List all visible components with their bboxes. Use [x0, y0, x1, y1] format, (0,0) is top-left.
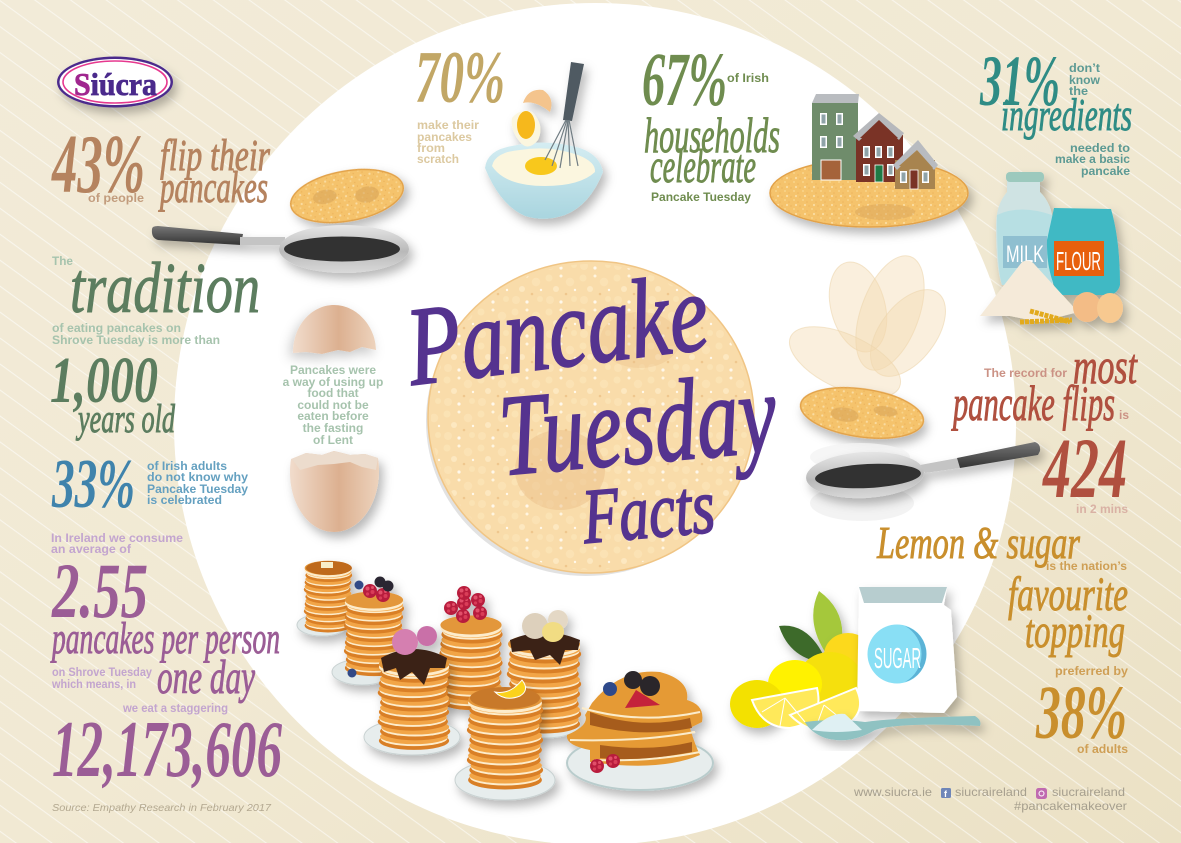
- stone house: [893, 140, 938, 189]
- stat: 33%: 33%: [51, 446, 135, 523]
- pancake tossed: [287, 161, 407, 231]
- stat: the tradition 1,000 years old: [50, 248, 260, 441]
- text: pancakes were a way of using up food: could not be: [297, 398, 369, 412]
- sugar bag: SUGAR: [874, 643, 921, 675]
- illustration: mixing bowl, egg and whisk: [485, 62, 603, 219]
- text: pancakes were a way of using up food: a way of using up: [283, 375, 383, 389]
- stack 6: lemon slice: [455, 680, 555, 800]
- illustration: pancake in air above pan: [152, 161, 409, 273]
- stat: 2.55 pancakes per person, 12,173,606: pancakes per person: [50, 614, 280, 663]
- stat: 2.55 pancakes per person, 12,173,606: we eat a staggering: [122, 701, 228, 715]
- stat: 33%: Pancake Tuesday: [147, 482, 248, 496]
- stat: lemon and sugar 38%: Lemon & sugar: [876, 517, 1081, 568]
- text: pancakes were a way of using up food: of Lent: [313, 433, 353, 447]
- stat: 31% ingredients: don’t: [1069, 61, 1100, 75]
- stat: the tradition 1,000 years old: of eating pancakes on: [52, 321, 181, 335]
- text: pancakes were a way of using up food: [283, 363, 383, 447]
- stat: the tradition 1,000 years old: 1,000: [50, 344, 158, 417]
- social links: #pancakemakeover: [1014, 799, 1127, 813]
- social links: [853, 785, 1127, 813]
- frying pan: [152, 225, 409, 273]
- stat: 31% ingredients: 31%: [979, 41, 1060, 121]
- stat: lemon and sugar 38%: preferred by: [1055, 664, 1128, 678]
- stat: 2.55 pancakes per person, 12,173,606: which means, in: [51, 677, 136, 691]
- stat: 67% households celebrate: Pancake Tuesday: [651, 190, 751, 204]
- source note: Source: Empathy Research in February 2017: [52, 802, 272, 814]
- logo: Siucra: Siúcra: [74, 66, 157, 102]
- social links: www.siucra.ie: [853, 785, 932, 799]
- flour pile: [980, 261, 1078, 322]
- illustration: pancake stacks: [297, 561, 713, 800]
- stat: 33%: is celebrated: [147, 493, 222, 507]
- illustration: pancake with houses: [770, 94, 968, 227]
- eggs: [1073, 292, 1123, 323]
- main title: Tuesday: [494, 349, 782, 501]
- illustration: lemons, sugar, spoon: [730, 587, 980, 740]
- stat: 70% make their pancakes: 70%: [415, 37, 505, 119]
- stat: 70% make their pancakes: from: [417, 141, 445, 155]
- text: pancakes were a way of using up food: food that: [307, 386, 359, 400]
- stat: the tradition 1,000 years old: The: [52, 254, 73, 268]
- stat: the tradition 1,000 years old: tradition: [70, 248, 260, 328]
- stat: 43% flip their pancakes: pancakes: [158, 163, 268, 212]
- stat: 67% households celebrate: households: [644, 107, 780, 163]
- whole lemons: [730, 633, 872, 728]
- wheat: [1020, 311, 1072, 322]
- stat: 2.55 pancakes per person, 12,173,606: an average of: [51, 542, 132, 556]
- stack 5: chocolate and banana: [507, 610, 581, 738]
- text: pancakes were a way of using up food: Pancakes were: [290, 363, 376, 377]
- stat: 2.55 pancakes per person, 12,173,606: one day: [157, 651, 255, 704]
- text: pancakes were a way of using up food: the fasting: [303, 421, 363, 435]
- icon: facebook: f: [944, 789, 948, 799]
- stat: 43% flip their pancakes: [51, 118, 271, 212]
- stat: record 424 flips: 424: [1042, 420, 1127, 516]
- stat: 43% flip their pancakes: flip their: [160, 131, 271, 180]
- stat: record 424 flips: is: [1119, 408, 1129, 422]
- stat: 2.55 pancakes per person, 12,173,606: In Ireland we consume: [51, 531, 183, 545]
- stat: the tradition 1,000 years old: years old: [75, 396, 176, 441]
- stat: 2.55 pancakes per person, 12,173,606: [50, 531, 282, 794]
- illustration: milk, flour, eggs: [980, 172, 1123, 323]
- stat: the tradition 1,000 years old: Shrove Tuesday is more than: [52, 333, 220, 347]
- white central circle: [174, 3, 1016, 843]
- sugar bag: [857, 587, 957, 713]
- social links: siucraireland: [1052, 785, 1125, 799]
- stat: 33%: do not know why: [147, 470, 248, 484]
- spoon: [805, 714, 980, 740]
- stat: 70% make their pancakes: make their: [417, 118, 479, 132]
- stat: 67% households celebrate: [642, 38, 780, 204]
- central pancake: [426, 261, 754, 576]
- stat: 2.55 pancakes per person, 12,173,606: 12,173,606: [52, 706, 282, 794]
- stat: 43% flip their pancakes: of people: [88, 191, 144, 205]
- lemon slices: [752, 688, 860, 731]
- stat: 33%: of Irish adults: [147, 459, 227, 473]
- stat: 67% households celebrate: celebrate: [650, 140, 756, 193]
- green house: [812, 94, 859, 180]
- stat: record 424 flips: most: [1073, 338, 1138, 394]
- flour bag: [1047, 208, 1120, 295]
- stat: 67% households celebrate: 67%: [642, 38, 727, 122]
- stack 4: raspberries: [439, 586, 503, 710]
- stat: 31% ingredients: make a basic: [1055, 152, 1130, 166]
- stat: record 424 flips: [951, 338, 1138, 516]
- stat: 31% ingredients: [979, 41, 1132, 178]
- stat: 33%: [51, 446, 248, 523]
- stack 2: berries: [332, 576, 404, 685]
- stat: 70% make their pancakes: scratch: [417, 152, 459, 166]
- icon: facebook: [941, 788, 951, 799]
- stack 1: butter and syrup: [297, 561, 352, 636]
- stat: lemon and sugar 38%: [876, 517, 1128, 756]
- illustration: second frying pan: [805, 442, 1040, 521]
- stat: lemon and sugar 38%: of adults: [1077, 742, 1128, 756]
- stat: 43% flip their pancakes: 43%: [51, 118, 145, 211]
- stat: 31% ingredients: the: [1069, 84, 1088, 98]
- stat: 31% ingredients: pancake: [1081, 164, 1130, 178]
- illustration: top eggshell: [293, 305, 376, 354]
- illustration: bottom eggshell: [290, 451, 379, 532]
- big pancake base: [770, 159, 968, 227]
- stat: record 424 flips: in 2 mins: [1076, 502, 1128, 516]
- milk bottle: [996, 172, 1053, 285]
- main title: Pancake: [399, 250, 715, 410]
- text: pancakes were a way of using up food: eaten before: [297, 409, 369, 423]
- stack 3: chocolate and ice cream: [364, 626, 460, 755]
- stat: lemon and sugar 38%: is the nation’s: [1046, 559, 1127, 573]
- stat: 31% ingredients: know: [1069, 73, 1101, 87]
- main title: [399, 250, 782, 560]
- social links: siucraireland: [955, 785, 1027, 799]
- main title: Facts: [578, 462, 718, 560]
- stat: 31% ingredients: needed to: [1070, 141, 1130, 155]
- stat: record 424 flips: The record for: [984, 366, 1067, 380]
- illustration: pancake above second pan: [797, 381, 927, 445]
- stat: lemon and sugar 38%: topping: [1025, 605, 1125, 658]
- milk bottle: MILK: [1006, 241, 1044, 268]
- stat: 2.55 pancakes per person, 12,173,606: on Shrove Tuesday: [52, 665, 152, 679]
- logo: Siucra: [57, 56, 173, 108]
- stat: 2.55 pancakes per person, 12,173,606: 2.55: [51, 547, 148, 634]
- stat: lemon and sugar 38%: 38%: [1035, 671, 1127, 755]
- stat: 67% households celebrate: of Irish: [727, 71, 769, 85]
- illustration: ghost pancakes flipping: [779, 247, 960, 412]
- flour bag: FLOUR: [1056, 246, 1101, 276]
- leaves: [779, 591, 842, 663]
- icon: instagram: [1036, 788, 1047, 799]
- stat: 70% make their pancakes: pancakes: [417, 130, 472, 144]
- stat: lemon and sugar 38%: favourite: [1008, 568, 1128, 621]
- crepes: [567, 671, 713, 790]
- stat: 70% make their pancakes: [415, 37, 505, 166]
- red house: [853, 113, 904, 182]
